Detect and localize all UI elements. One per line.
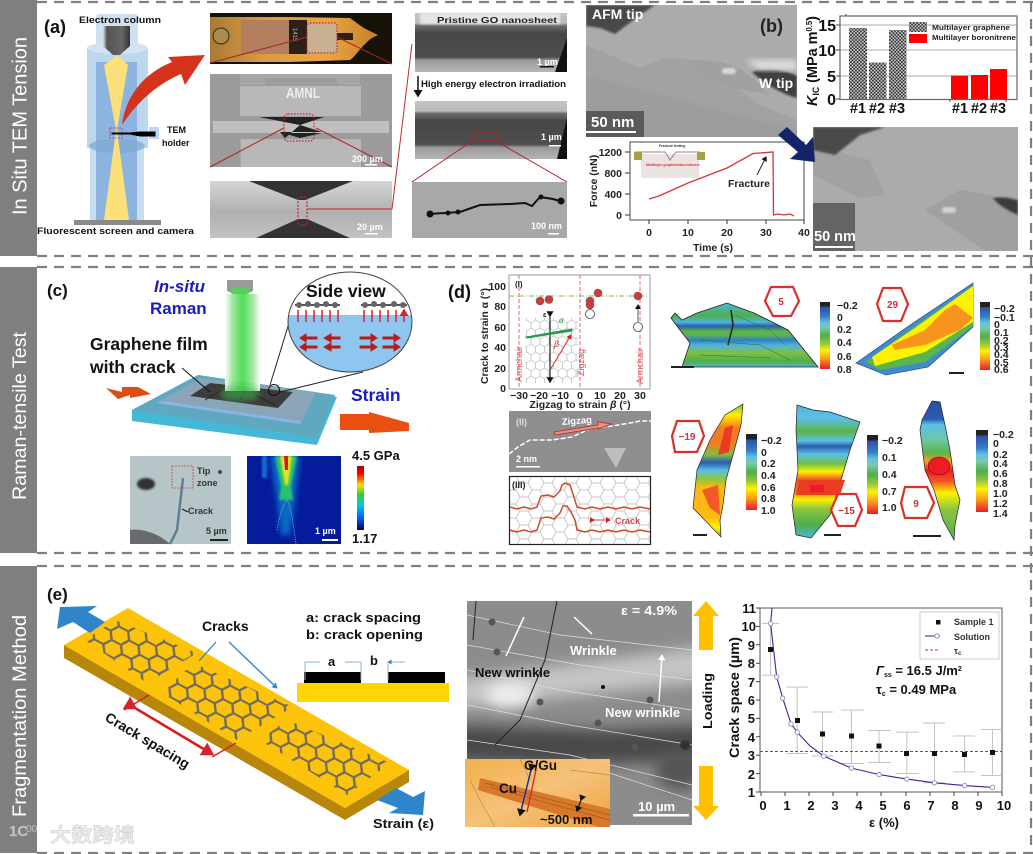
colour bar 9: 1.4 bbox=[993, 508, 1008, 520]
line chart: force vs time: Force (nN) bbox=[588, 155, 600, 207]
laser beam bbox=[220, 280, 260, 401]
colour bar 29 bbox=[980, 302, 1015, 376]
line chart: crack space vs strain: 6 bbox=[903, 798, 911, 813]
micrograph (II) zigzag: 2 nm bbox=[516, 454, 537, 464]
scatter chart (I): −10 bbox=[551, 390, 569, 402]
line chart: crack space vs strain: 5 bbox=[879, 798, 887, 813]
line chart: crack space vs strain: 11 bbox=[742, 601, 756, 616]
bar chart: KIC: #1 bbox=[850, 101, 866, 117]
label: strain: Strain bbox=[351, 385, 401, 405]
TEM image: AFM and W tip: (b) bbox=[760, 16, 783, 36]
micrograph: wrinkles: New wrinkle bbox=[605, 705, 680, 720]
strain map: -19 bbox=[672, 404, 782, 537]
TEM image: AFM and W tip: W tip bbox=[759, 75, 793, 91]
hexagon badge 5 bbox=[765, 287, 799, 316]
scatter chart (I): α bbox=[559, 316, 564, 325]
dimension: crack spacing bbox=[102, 695, 236, 772]
line chart: crack space vs strain: 9 bbox=[975, 798, 983, 813]
inset: Cu foil bbox=[465, 758, 610, 827]
scatter chart (I): 20 bbox=[494, 363, 506, 375]
hexagon badge 5: 5 bbox=[778, 297, 784, 308]
label: cracks bbox=[199, 618, 277, 688]
strip with graphene patches bbox=[64, 608, 409, 820]
line chart: crack space vs strain: 1 bbox=[783, 798, 791, 813]
colour bar -19: 0.2 bbox=[761, 458, 776, 470]
SEM: pristine GO nanosheet bbox=[415, 13, 567, 72]
colour bar 29: 0.4 bbox=[994, 349, 1009, 361]
colour bar 9: 0.4 bbox=[993, 458, 1008, 470]
line chart: crack space vs strain: ε (%) bbox=[869, 815, 899, 830]
SEM: AMNL device bbox=[210, 74, 392, 167]
section tab: Raman-tensile Test: Raman-tensile Test bbox=[10, 331, 31, 500]
schematic labels: Fluorescent screen and camera bbox=[37, 226, 195, 236]
bar chart: KIC: 15 bbox=[818, 18, 836, 35]
error bars bbox=[762, 624, 1002, 783]
label: graphene film: Graphene film bbox=[90, 334, 208, 354]
equations: Γ bbox=[876, 663, 885, 678]
scatter chart (I): 20 bbox=[614, 390, 626, 402]
TEM image: AFM and W tip bbox=[586, 5, 797, 137]
equations: τ bbox=[876, 682, 882, 697]
line chart: crack space vs strain: 10 bbox=[997, 798, 1011, 813]
legend: Multilayer boronitrene bbox=[932, 33, 1016, 42]
definitions: b: crack opening bbox=[306, 627, 423, 642]
legend: Multilayer graphene bbox=[932, 23, 1010, 32]
schematic: crack cross-section bbox=[297, 653, 449, 702]
TEM image: AFM and W tip: AFM tip bbox=[592, 6, 643, 22]
line chart: crack space vs strain: 5 bbox=[748, 711, 755, 726]
SEM: notch bbox=[210, 44, 412, 238]
colour bar 9: 0 bbox=[993, 438, 999, 450]
line chart: crack space vs strain: 3 bbox=[831, 798, 839, 813]
inset schematic bbox=[634, 144, 705, 178]
substrate bbox=[132, 375, 337, 445]
legend: c bbox=[958, 651, 962, 657]
label: In-situ Raman: In-situ bbox=[154, 277, 206, 296]
schematic: TEM column bbox=[37, 14, 195, 236]
section tab: In Situ TEM Tension: In Situ TEM Tension bbox=[10, 37, 32, 215]
TEM image: AFM and W tip: 50 nm bbox=[591, 114, 634, 131]
colour bar -15: 0.1 bbox=[882, 452, 897, 464]
SEM: crack close-up bbox=[412, 182, 567, 238]
bar chart: KIC: (MPa m bbox=[804, 32, 821, 87]
arrow: loading down bbox=[693, 766, 719, 820]
label: graphene film: with crack bbox=[89, 357, 176, 377]
legend: τ bbox=[954, 646, 958, 656]
line chart: force vs time: 400 bbox=[604, 189, 622, 201]
line chart: force vs time: 0 bbox=[616, 210, 622, 222]
label: cracks: Cracks bbox=[202, 618, 249, 634]
watermark: 00 bbox=[26, 824, 38, 835]
line chart: crack space vs strain: 9 bbox=[748, 638, 755, 653]
scatter chart (I): 0 bbox=[577, 390, 583, 402]
colour bar -15 bbox=[867, 435, 903, 514]
colour bar 9: 0.6 bbox=[993, 468, 1008, 480]
colour bar 29: 0 bbox=[994, 319, 1000, 331]
line chart: crack space vs strain: 1 bbox=[748, 785, 755, 800]
schematic: crack cross-section: a bbox=[328, 654, 336, 669]
bar chart: KIC: #1 bbox=[952, 101, 968, 117]
colour bar 29: 0.5 bbox=[994, 357, 1009, 369]
SEM: irradiated nanosheet: 1 µm bbox=[541, 132, 562, 142]
colour bar -15: 1.0 bbox=[882, 502, 897, 514]
bar chart: KIC: 10 bbox=[818, 43, 836, 60]
arrow: strain left bbox=[106, 387, 151, 399]
schematic labels: TEM bbox=[167, 125, 186, 135]
bar chart: KIC: #3 bbox=[990, 101, 1006, 117]
scatter chart (I): 80 bbox=[494, 301, 506, 313]
micrograph (II) zigzag: (II) bbox=[516, 417, 527, 427]
colour bar -19: 0.8 bbox=[761, 493, 776, 505]
scatter chart (I): 30 bbox=[634, 390, 646, 402]
hexagon badge 9: 9 bbox=[913, 499, 919, 510]
line chart: crack space vs strain: 2 bbox=[807, 798, 815, 813]
label (d): (d) bbox=[448, 282, 471, 302]
SEM: AMNL device: AMNL bbox=[286, 85, 320, 102]
line chart: crack space vs strain: 4 bbox=[855, 798, 863, 813]
line chart: force vs time: 10 bbox=[682, 227, 694, 239]
strain map: 5 bbox=[671, 287, 858, 376]
colour bar -19: 1.0 bbox=[761, 505, 776, 517]
dimension: crack spacing: Crack spacing bbox=[102, 709, 193, 772]
scatter chart (I): Zigzag to strain β (°) bbox=[529, 399, 631, 411]
scatter chart (I): Armchair bbox=[635, 348, 645, 384]
colour bar 5: 0.4 bbox=[837, 337, 852, 349]
micrograph: wrinkles: ε = 4.9% bbox=[621, 604, 677, 618]
scatter chart (I): Zigzag bbox=[576, 349, 586, 376]
schematic: crack cross-section: b bbox=[370, 653, 378, 668]
scatter chart (I): 100 bbox=[488, 281, 506, 293]
colour bar 9 bbox=[976, 429, 1014, 520]
scatter chart (I): 0 bbox=[500, 383, 506, 395]
micrograph: wrinkles: Wrinkle bbox=[570, 643, 617, 658]
line chart: crack space vs strain: 2 bbox=[748, 767, 755, 782]
line chart: force vs time: Fracture bbox=[728, 178, 770, 190]
micrograph: wrinkles: New wrinkle bbox=[475, 665, 550, 680]
hexagon badge -15: −15 bbox=[838, 506, 855, 517]
label (a): (a) bbox=[44, 17, 66, 37]
colour bar -19: 0.6 bbox=[761, 482, 776, 494]
strain map: 29 bbox=[856, 283, 1015, 376]
line chart: crack space vs strain: 8 bbox=[748, 656, 755, 671]
section tab: Fragmentation Method bbox=[0, 566, 37, 853]
colour bar 5: 0.6 bbox=[837, 351, 852, 363]
line chart: force vs time: 20 bbox=[721, 227, 733, 239]
SEM: pristine GO nanosheet: 1 µm bbox=[537, 57, 558, 67]
definitions bbox=[306, 610, 423, 642]
micrograph: wrinkles: 10 µm bbox=[638, 799, 675, 814]
line chart: crack space vs strain: 7 bbox=[927, 798, 935, 813]
colour bar 9: 0.2 bbox=[993, 449, 1008, 461]
line chart: force vs time: 1200 bbox=[599, 147, 622, 159]
colour bar: stress: 4.5 GPa bbox=[352, 448, 400, 463]
colour bar -19: 0.4 bbox=[761, 470, 776, 482]
schematic (III) crack: Crack bbox=[615, 516, 641, 526]
colour bar -19 bbox=[746, 434, 782, 517]
colour bar 9: −0.2 bbox=[993, 429, 1014, 441]
photo: TEM holder: 1415 bbox=[291, 28, 297, 42]
equations: ss bbox=[884, 672, 892, 679]
SEM: notch: 20 µm bbox=[357, 222, 383, 232]
equations: c bbox=[882, 691, 886, 698]
schematic labels: Electron column bbox=[79, 15, 161, 25]
arrow: loading up bbox=[693, 601, 719, 650]
micrograph (II) zigzag: Zigzag bbox=[561, 415, 592, 428]
SEM: pristine GO nanosheet: Pristine GO nanosheet bbox=[437, 15, 557, 25]
panel: (e) fragmentation bbox=[47, 585, 1011, 831]
colour bar 9: 1.0 bbox=[993, 488, 1008, 500]
watermark bbox=[9, 823, 135, 847]
hexagon badge 29: 29 bbox=[887, 300, 898, 311]
colour bar -15: −0.2 bbox=[882, 435, 903, 447]
hexagon badge -19: −19 bbox=[679, 432, 696, 443]
photo: TEM holder bbox=[210, 13, 392, 64]
colour bar -15: 0.7 bbox=[882, 486, 897, 498]
colour bar 29: 0.3 bbox=[994, 342, 1009, 354]
line chart: force vs time: 800 bbox=[604, 168, 622, 180]
scatter chart (I): 60 bbox=[494, 322, 506, 334]
colour bar 9: 1.2 bbox=[993, 498, 1008, 510]
schematic labels bbox=[37, 15, 195, 236]
bar chart: KIC: #2 bbox=[971, 101, 987, 117]
panel: (c) Raman tensile bbox=[47, 272, 412, 546]
SEM: crack close-up: 100 nm bbox=[531, 221, 562, 231]
bar chart: KIC: #2 bbox=[869, 101, 885, 117]
bar chart: KIC: #3 bbox=[889, 101, 905, 117]
legend: Sample 1 bbox=[954, 617, 994, 627]
definitions: a: crack spacing bbox=[306, 610, 421, 625]
label (e): (e) bbox=[47, 585, 68, 604]
label: graphene film bbox=[89, 334, 210, 392]
line chart: crack space vs strain: 3 bbox=[748, 748, 755, 763]
inset: Cu foil: ~500 nm bbox=[540, 812, 592, 827]
line chart: force vs time: 30 bbox=[760, 227, 772, 239]
micrograph: tip zone: zone bbox=[197, 478, 218, 488]
section tab: Raman-tensile Test bbox=[0, 267, 37, 553]
line chart: crack space vs strain: 4 bbox=[748, 730, 756, 745]
micrograph: tip zone: Crack bbox=[188, 506, 214, 516]
scatter chart (I): ε bbox=[543, 312, 547, 319]
SEM: irradiated nanosheet bbox=[412, 101, 567, 182]
heat map: stress field bbox=[247, 456, 341, 544]
SEM: AMNL device: 200 µm bbox=[352, 154, 383, 164]
section tab: Fragmentation Method: Fragmentation Method bbox=[10, 615, 31, 817]
line chart: crack space vs strain: 7 bbox=[748, 675, 755, 690]
watermark: 1C bbox=[9, 823, 28, 840]
micrograph: tip zone: 5 µm bbox=[206, 526, 227, 536]
schematic labels: holder bbox=[162, 138, 190, 148]
label: In-situ Raman bbox=[150, 277, 207, 318]
colour bar 5 bbox=[820, 300, 858, 376]
heading: side view: Side view bbox=[306, 281, 386, 301]
colour bar 29: 0.6 bbox=[994, 364, 1009, 376]
bar chart: KIC: ) bbox=[804, 16, 821, 21]
equations bbox=[876, 663, 962, 698]
label (c): (c) bbox=[47, 281, 68, 300]
scatter chart (I): 40 bbox=[494, 342, 506, 354]
colour bar -19: −0.2 bbox=[761, 435, 782, 447]
colour bar 5: 0 bbox=[837, 312, 843, 324]
inset schematic: Multilayer graphene/boronitrene bbox=[646, 163, 700, 167]
label: In-situ Raman: Raman bbox=[150, 299, 207, 318]
TEM image: after fracture: 50 nm bbox=[814, 229, 856, 245]
label: strain epsilon: Strain (ε) bbox=[373, 816, 434, 831]
atoms and stress arrows bbox=[295, 301, 407, 351]
colour bar 29: −0.1 bbox=[994, 312, 1015, 324]
colour bar 29: 0.1 bbox=[994, 327, 1009, 339]
strain map: 9 bbox=[901, 401, 1014, 540]
bar chart: KIC: IC bbox=[811, 86, 821, 96]
scatter chart (I): Armchair bbox=[514, 346, 524, 382]
schematic (III) crack: (III) bbox=[512, 480, 526, 490]
legend bbox=[920, 612, 999, 659]
colour bar -19: 0 bbox=[761, 447, 767, 459]
legend bbox=[909, 22, 1016, 43]
arrow: strain top left bbox=[57, 606, 105, 633]
arrow: strain right bbox=[340, 412, 409, 433]
line chart: crack space vs strain: 0 bbox=[759, 798, 767, 813]
colour bar 5: 0.8 bbox=[837, 364, 852, 376]
line chart: crack space vs strain: 10 bbox=[742, 619, 756, 634]
line chart: force vs time: 0 bbox=[646, 227, 652, 239]
strain map: -15 bbox=[792, 405, 903, 538]
scatter chart (I): −20 bbox=[530, 390, 548, 402]
bar chart: KIC: 0 bbox=[827, 92, 836, 109]
watermark: 大数跨境 bbox=[50, 823, 135, 847]
heat map: stress field: 1 µm bbox=[315, 526, 336, 536]
micrograph: tip zone: Tip bbox=[197, 466, 211, 476]
colour bar -15: 0.4 bbox=[882, 469, 897, 481]
bar chart: KIC: 5 bbox=[827, 69, 836, 86]
colour bar: stress bbox=[352, 448, 400, 546]
panel: (d) crack orientation and strain maps bbox=[448, 275, 1015, 544]
TEM image: after fracture bbox=[813, 127, 1018, 251]
bar chart: KIC: K bbox=[804, 94, 821, 106]
panel: (b) fracture test bbox=[586, 5, 1018, 254]
inset: side view bbox=[268, 272, 412, 396]
line chart: crack space vs strain bbox=[727, 601, 1011, 830]
panel: (a) in situ TEM bbox=[37, 13, 567, 238]
scatter chart (I): −30 bbox=[510, 390, 528, 402]
micrograph: tip zone bbox=[130, 456, 231, 544]
hexagon badge 29 bbox=[877, 288, 908, 321]
schematic (III) crack bbox=[510, 476, 650, 544]
arrow: navy bbox=[778, 127, 815, 162]
inset schematic: Fracture testing bbox=[659, 144, 685, 148]
colour bar 5: −0.2 bbox=[837, 300, 858, 312]
line chart: crack space vs strain: Crack space (µm) bbox=[727, 637, 742, 758]
annotation: electron irradiation: High energy electron irradiation bbox=[421, 79, 566, 89]
scatter chart (I): 10 bbox=[594, 390, 606, 402]
colour bar 5: 0.2 bbox=[837, 324, 852, 336]
bar chart: KIC bbox=[804, 14, 1017, 117]
equations: 2 bbox=[958, 666, 962, 673]
legend: Solution bbox=[954, 632, 990, 642]
micrograph (II) zigzag bbox=[509, 411, 651, 472]
colour bar 9: 0.8 bbox=[993, 478, 1008, 490]
arrow: strain bottom right bbox=[377, 788, 425, 815]
bar chart: KIC: 0.5 bbox=[805, 20, 814, 32]
line chart: force vs time: Time (s) bbox=[693, 242, 733, 254]
colour bar 29: −0.2 bbox=[994, 303, 1015, 315]
colour bar 29: 0.2 bbox=[994, 335, 1009, 347]
colour bar: stress: 1.17 bbox=[352, 531, 377, 546]
equations: = 0.49 MPa bbox=[886, 682, 957, 697]
line chart: crack space vs strain: 6 bbox=[748, 693, 755, 708]
line chart: force vs time bbox=[588, 142, 810, 254]
arrow: big red curved bbox=[122, 55, 205, 125]
scatter chart (I) bbox=[479, 275, 650, 411]
section tab: In Situ TEM Tension bbox=[0, 0, 37, 256]
scatter chart (I): (I) bbox=[515, 280, 523, 289]
inset: Cu foil: Cu bbox=[499, 781, 517, 796]
inset: Cu foil: G/Gu bbox=[524, 758, 557, 773]
micrograph: wrinkles bbox=[465, 601, 692, 827]
scatter chart (I): β bbox=[553, 339, 559, 349]
label: loading: Loading bbox=[700, 673, 715, 729]
line chart: crack space vs strain: 8 bbox=[951, 798, 959, 813]
equations: = 16.5 J/m bbox=[892, 663, 958, 678]
scatter chart (I): Crack to strain α (°) bbox=[479, 288, 491, 384]
line chart: force vs time: 40 bbox=[798, 227, 810, 239]
